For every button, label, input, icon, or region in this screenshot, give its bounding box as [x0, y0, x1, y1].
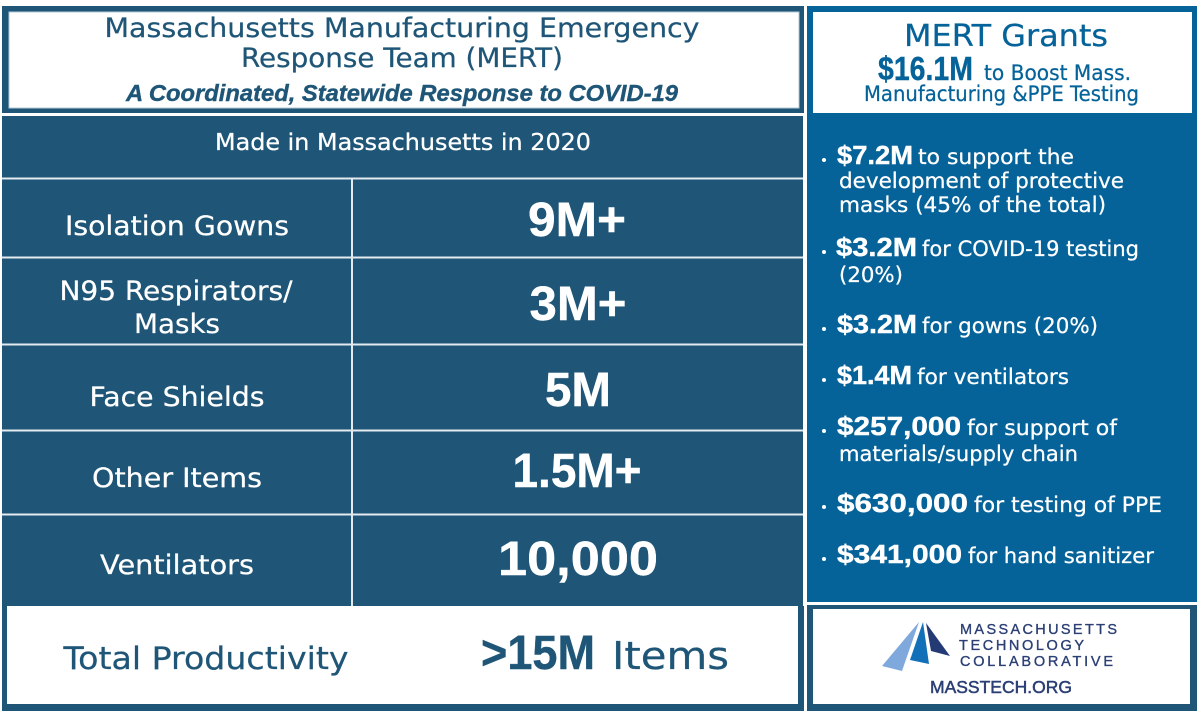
- row: isolation gowns: 9M+: [528, 194, 626, 247]
- heading: title line 2: Response Team (MERT): [241, 43, 563, 74]
- grant: gowns: for gowns (20%): [922, 314, 1098, 338]
- panel: Mass Tech logo: [807, 605, 1197, 711]
- grant: testing: for COVID-19 testing: [922, 237, 1139, 261]
- row: isolation gowns: [65, 194, 626, 247]
- row: face shields: [90, 364, 611, 417]
- subtitle: A Coordinated, Statewide Response to COVID-19: [125, 80, 678, 106]
- row: ventilators: Ventilators: [100, 550, 254, 581]
- row: face shields: 5M: [545, 364, 611, 417]
- grant: supply chain: materials/supply chain: [839, 442, 1078, 466]
- total label: Total Productivity: [62, 641, 349, 677]
- panel: total productivity: [2, 606, 804, 711]
- grant: masks: masks (45% of the total): [839, 193, 1106, 217]
- row: N95 respirators: N95 Respirators/: [60, 276, 293, 307]
- grants header: to Boost Mass.: [984, 61, 1131, 85]
- row: other items: [92, 445, 642, 498]
- panel: MERT grants: [807, 6, 1197, 602]
- grants header: MERT Grants: [904, 19, 1108, 54]
- row: ventilators: 10,000: [498, 533, 658, 586]
- total value: >15M: [481, 627, 595, 680]
- grants header: [813, 12, 1192, 113]
- grant: supply chain: for support of: [967, 416, 1118, 440]
- grant: hand sanitizer: for hand sanitizer: [968, 544, 1154, 568]
- grant: PPE testing: [822, 488, 1162, 518]
- grant: PPE testing: for testing of PPE: [974, 493, 1162, 517]
- grant: gowns: [822, 309, 1098, 339]
- logo wordmark: MASSACHUSETTS: [960, 622, 1117, 638]
- grant: gowns: $3.2M: [837, 309, 917, 339]
- heading: title line 1: Massachusetts Manufacturing Emergency: [104, 13, 699, 44]
- grant: hand sanitizer: $341,000: [837, 539, 962, 569]
- logo wordmark: TECHNOLOGY: [959, 638, 1084, 654]
- grant: testing: [822, 232, 1139, 287]
- panel: made in Massachusetts table: [2, 116, 803, 606]
- logo wordmark: [959, 622, 1117, 670]
- row: face shields: Face Shields: [90, 382, 264, 413]
- logo wordmark: COLLABORATIVE: [960, 654, 1113, 670]
- total value: [481, 627, 729, 680]
- grant: hand sanitizer: [822, 539, 1154, 569]
- row: ventilators: [100, 533, 658, 586]
- grant: PPE testing: $630,000: [837, 488, 968, 518]
- grant: ventilators: for ventilators: [917, 365, 1069, 389]
- row: other items: 1.5M+: [512, 445, 642, 498]
- row: N95 respirators: [60, 276, 626, 340]
- grants header: Manufacturing &PPE Testing: [864, 82, 1139, 106]
- table heading: Made in Massachusetts in 2020: [215, 130, 591, 156]
- grants header: $16.1M: [878, 50, 973, 87]
- grant: masks: to support the: [918, 145, 1074, 169]
- grant: ventilators: $1.4M: [837, 360, 912, 390]
- row: other items: Other Items: [92, 463, 262, 494]
- grant: ventilators: [822, 360, 1069, 390]
- icon: Mass Tech logo mark: [882, 622, 950, 671]
- grant: masks: [822, 140, 1124, 217]
- panel: title: [2, 6, 804, 113]
- row: N95 respirators: 3M+: [530, 278, 626, 331]
- grant: masks: development of protective: [839, 169, 1124, 193]
- grant: supply chain: $257,000: [837, 411, 961, 441]
- website: MASSTECH.ORG: [930, 677, 1072, 697]
- grant: testing: (20%): [839, 263, 903, 287]
- grant: masks: $7.2M: [837, 140, 913, 170]
- grant: supply chain: [822, 411, 1118, 466]
- total value: Items: [612, 634, 729, 678]
- row: isolation gowns: Isolation Gowns: [65, 211, 289, 242]
- row: N95 respirators: Masks: [134, 309, 220, 340]
- grant: testing: $3.2M: [836, 232, 917, 262]
